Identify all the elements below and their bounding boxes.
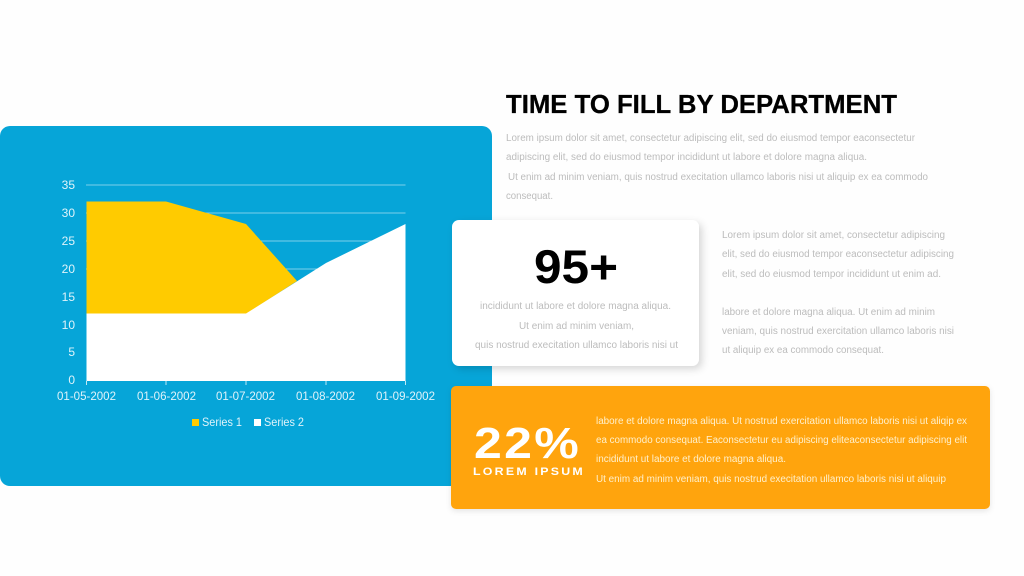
area: series 1 <box>86 202 297 314</box>
stat description <box>475 301 678 351</box>
chart legend: Series 1 <box>202 415 242 429</box>
intro paragraph: Lorem ipsum dolor sit amet, consectetur adipiscing elit, sed do eiusmod tempor eaconsectetur <box>506 133 916 144</box>
stat description: Ut enim ad minim veniam, <box>519 321 634 332</box>
side text block: elit, sed do eiusmod tempor eaconsectetur adipiscing <box>722 249 954 260</box>
x axis labels: 01-09-2002 <box>376 389 435 403</box>
stat: 22%: 22% <box>474 419 581 468</box>
chart legend: Series 2 <box>264 415 304 429</box>
side text block <box>722 230 954 356</box>
y axis labels: 35 <box>62 178 75 192</box>
panel: 95+ stat card <box>452 220 699 366</box>
y axis labels: 0 <box>68 373 75 387</box>
stat description: incididunt ut labore et dolore magna aliqua. <box>480 301 671 312</box>
intro paragraph: adipiscing elit, sed do eiusmod tempor incididunt ut labore et dolore magna aliqua. <box>506 152 867 163</box>
y axis labels: 15 <box>62 290 75 304</box>
panel: orange stat banner <box>451 386 990 509</box>
side text block: veniam, quis nostrud exercitation ullamco laboris nisi <box>722 326 954 337</box>
side text block: labore et dolore magna aliqua. Ut enim ad minim <box>722 307 935 318</box>
title: TIME TO FILL BY DEPARTMENT <box>506 89 897 119</box>
y axis labels: 30 <box>62 206 75 220</box>
y axis labels: 25 <box>62 234 75 248</box>
x axis labels: 01-07-2002 <box>216 389 275 403</box>
stat: 95+: 95+ <box>534 240 618 293</box>
banner text: labore et dolore magna aliqua. Ut nostrud exercitation ullamco laboris nisi ut aliqip ex <box>596 416 967 427</box>
area: series 2 <box>86 224 406 381</box>
intro paragraph <box>506 133 928 202</box>
x axis labels: 01-06-2002 <box>137 389 196 403</box>
side text block: elit, sed do eiusmod tempor incididunt ut enim ad. <box>722 269 941 280</box>
intro paragraph: Ut enim ad minim veniam, quis nostrud execitation ullamco laboris nisi ut aliquip ex ea commodo <box>508 172 928 183</box>
stat label: LOREM IPSUM <box>473 466 585 478</box>
intro paragraph: consequat. <box>506 191 553 202</box>
x axis labels <box>57 389 435 403</box>
banner text: Ut enim ad minim veniam, quis nostrud execitation ullamco laboris nisi ut aliquip <box>596 474 946 485</box>
y axis labels: 20 <box>62 262 75 276</box>
y axis labels: 10 <box>62 318 75 332</box>
grid lines <box>86 185 406 269</box>
chart legend <box>192 415 304 429</box>
stat description: quis nostrud execitation ullamco laboris nisi ut <box>475 340 678 351</box>
banner text: ea commodo consequat. Eaconsectetur eu adipiscing eliteaconsectetur adipiscing elit <box>596 435 967 446</box>
x axis labels: 01-05-2002 <box>57 389 116 403</box>
side text block: ut aliquip ex ea commodo consequat. <box>722 345 884 356</box>
banner text: incididunt ut labore et dolore magna aliqua. <box>596 454 786 465</box>
side text block: Lorem ipsum dolor sit amet, consectetur adipiscing <box>722 230 945 241</box>
x axis labels: 01-08-2002 <box>296 389 355 403</box>
y axis labels <box>62 178 75 387</box>
area chart <box>57 178 435 429</box>
banner text <box>596 416 967 485</box>
panel: blue chart background <box>0 126 492 486</box>
x axis ticks <box>86 381 406 385</box>
y axis labels: 5 <box>68 345 75 359</box>
